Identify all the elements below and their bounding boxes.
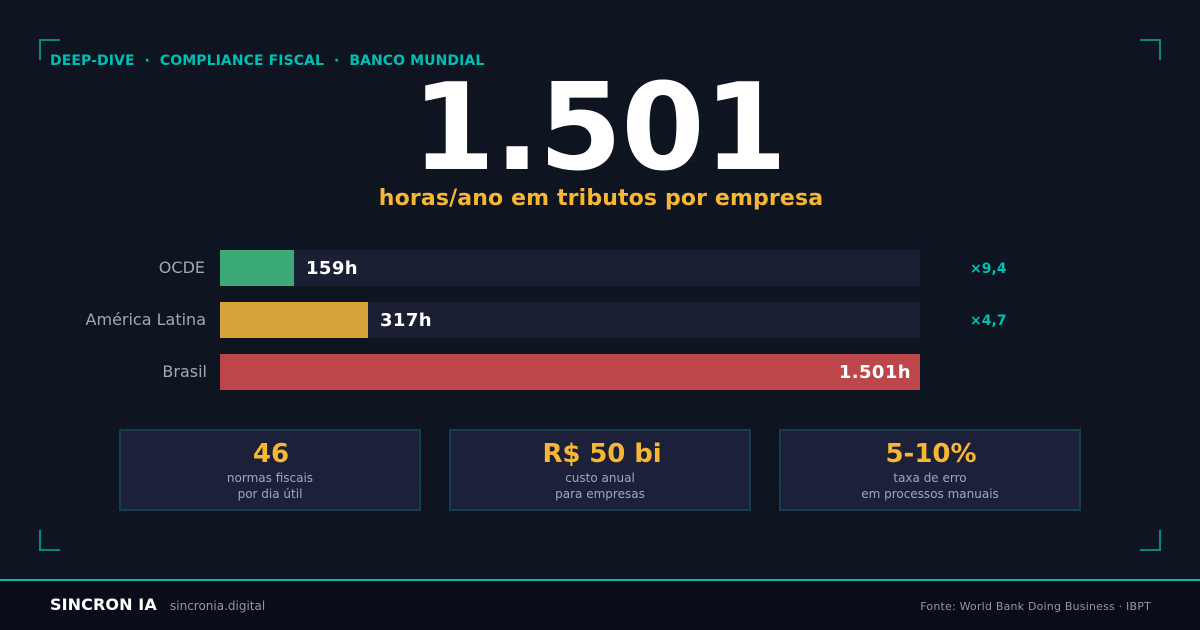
bar: Brasil — [220, 354, 920, 390]
bar track: OCDE — [220, 250, 920, 286]
stat description: para empresas — [555, 487, 645, 501]
value: Brasil: 1.501h — [839, 362, 911, 383]
stat description: custo anual — [565, 471, 635, 485]
stat card: normas fiscais — [119, 429, 421, 511]
bar: América Latina — [220, 302, 368, 338]
row: OCDE — [159, 250, 1007, 286]
value: América Latina: 317h — [380, 310, 432, 331]
brand name: SINCRON IA — [50, 595, 157, 614]
corner bracket: bottom right — [1140, 530, 1161, 551]
multiplier: OCDE: ×9,4 — [970, 261, 1007, 277]
stat value: 46 — [253, 439, 289, 469]
website: sincronia.digital — [170, 599, 265, 613]
stat description: normas fiscais — [227, 471, 313, 485]
corner bracket: top left — [39, 39, 60, 60]
hero number: 1.501 — [412, 59, 786, 198]
stat value: 5-10% — [885, 439, 977, 469]
bar chart: annual tax hours — [86, 250, 1007, 390]
stat description: por dia útil — [238, 487, 302, 501]
stat description: taxa de erro — [893, 471, 967, 485]
multiplier: América Latina: ×4,7 — [970, 313, 1007, 329]
stat card: custo anual — [449, 429, 751, 511]
row: América Latina — [86, 302, 1007, 338]
stat value: R$ 50 bi — [542, 439, 662, 469]
label: Brasil: Brasil — [162, 362, 207, 381]
row: Brasil — [162, 354, 920, 390]
bar: OCDE — [220, 250, 294, 286]
footer bar — [0, 579, 1200, 630]
bar track: América Latina — [220, 302, 920, 338]
stat card: taxa de erro — [779, 429, 1081, 511]
stat description — [227, 471, 313, 501]
corner bracket: top right — [1140, 39, 1161, 60]
value: OCDE: 159h — [306, 258, 358, 279]
stat description — [555, 471, 645, 501]
stat description — [861, 471, 999, 501]
corner bracket: bottom left — [39, 530, 60, 551]
eyebrow heading: DEEP-DIVE · COMPLIANCE FISCAL · BANCO MUNDIAL — [50, 53, 484, 69]
label: OCDE: OCDE — [159, 258, 205, 277]
hero subtitle: horas/ano em tributos por empresa — [379, 186, 823, 211]
label: América Latina: América Latina — [86, 310, 206, 329]
source note: Fonte: World Bank Doing Business · IBPT — [920, 600, 1151, 613]
stat description: em processos manuais — [861, 487, 999, 501]
